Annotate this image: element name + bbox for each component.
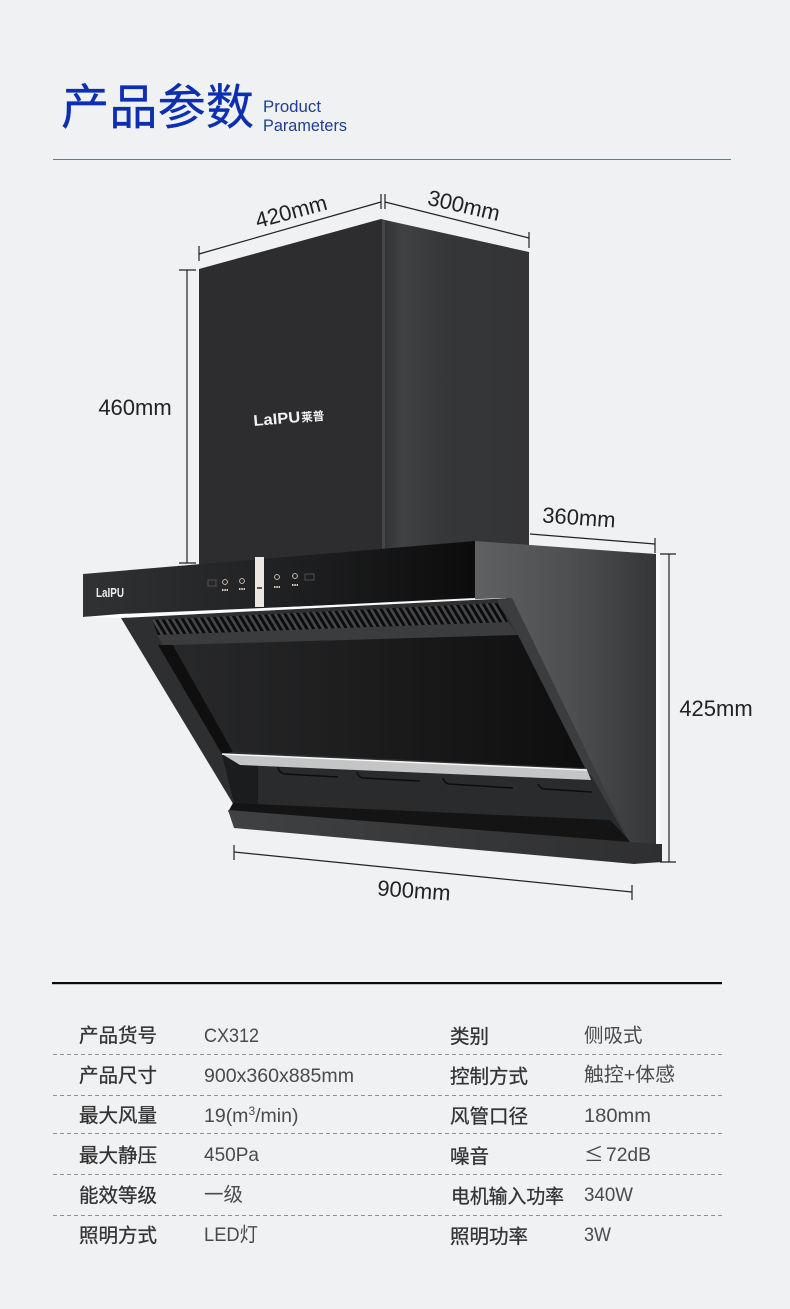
dimension: 360mm	[530, 502, 655, 553]
row: 最大风量 / 风管口径: 19(m	[204, 1105, 248, 1127]
row: 最大风量 / 风管口径: 风管口径	[450, 1100, 528, 1129]
black inner side band	[158, 645, 233, 754]
row: 最大静压 / 噪音: 噪音	[450, 1140, 489, 1169]
band logo: LaIPU	[96, 586, 124, 600]
row: 产品货号 / 类别: 侧吸式	[584, 1025, 643, 1047]
dimension: 360mm: 360mm	[542, 502, 616, 533]
row: 照明方式 / 照明功率: LED灯	[204, 1224, 258, 1246]
subtitle	[263, 98, 347, 135]
lower cavity	[222, 755, 632, 845]
title: 产品参数	[61, 68, 254, 138]
chimney logo: 莱普	[301, 407, 325, 426]
center white switch strip	[255, 557, 264, 607]
row: 最大静压 / 噪音	[79, 1138, 651, 1169]
row: 能效等级 / 电机输入功率	[79, 1179, 634, 1209]
row: 产品尺寸 / 控制方式: 产品尺寸	[79, 1059, 157, 1088]
row: 最大风量 / 风管口径: 180mm	[584, 1105, 651, 1127]
dimension lines	[98, 185, 753, 906]
row: 产品尺寸 / 控制方式: 控制方式	[450, 1060, 528, 1089]
row: 最大静压 / 噪音: ≤	[584, 1138, 604, 1167]
row: 最大风量 / 风管口径: 最大风量	[79, 1099, 157, 1128]
dimension: 300mm	[385, 185, 529, 248]
right frame edge	[497, 598, 630, 842]
row: 最大静压 / 噪音: 最大静压	[79, 1139, 157, 1168]
row: 能效等级 / 电机输入功率: 一级	[204, 1184, 243, 1206]
white halo around wall panel	[530, 545, 660, 845]
chimney logo: LaIPU	[253, 409, 301, 430]
row: 照明方式 / 照明功率	[79, 1219, 612, 1249]
cavity grooves	[278, 767, 592, 792]
row: 最大静压 / 噪音: 450Pa	[204, 1144, 259, 1166]
touch controls	[208, 574, 314, 590]
dimension: 420mm	[199, 190, 381, 261]
dimension: 425mm: 425mm	[679, 696, 753, 721]
chimney duct cover	[199, 219, 529, 568]
row: 产品尺寸 / 控制方式	[79, 1059, 675, 1089]
header rule	[53, 159, 731, 160]
row: 能效等级 / 电机输入功率: 电机输入功率	[451, 1180, 564, 1209]
dimension: 900mm	[234, 845, 632, 906]
row: 产品尺寸 / 控制方式: 900x360x885mm	[204, 1065, 354, 1087]
dimension: 420mm: 420mm	[252, 190, 330, 233]
row: 能效等级 / 电机输入功率: 340W	[584, 1184, 634, 1206]
subtitle: Product	[263, 98, 321, 116]
row: 最大风量 / 风管口径: /min)	[255, 1105, 298, 1127]
subtitle: Parameters	[263, 117, 347, 135]
row: 能效等级 / 电机输入功率: 能效等级	[79, 1179, 157, 1208]
vent slats	[152, 603, 508, 635]
row: 产品货号 / 类别: CX312	[204, 1025, 259, 1047]
dimension: 460mm	[98, 270, 196, 563]
specification table	[52, 982, 722, 1249]
row: 照明方式 / 照明功率: 照明功率	[450, 1220, 528, 1249]
chimney logo	[253, 407, 325, 430]
dimension: 425mm	[660, 554, 753, 862]
control band	[83, 541, 475, 617]
vent lower ledge	[157, 622, 518, 645]
black glass panel	[173, 635, 585, 768]
row: 最大静压 / 噪音: 72dB	[606, 1144, 651, 1166]
dimension: 300mm: 300mm	[425, 185, 502, 226]
row: 照明方式 / 照明功率: 3W	[584, 1224, 612, 1246]
row: 最大风量 / 风管口径: 3	[248, 1104, 255, 1118]
dimension: 460mm: 460mm	[98, 395, 172, 420]
row: 照明方式 / 照明功率: 照明方式	[79, 1219, 157, 1248]
side wall panel	[475, 541, 656, 846]
row: 产品尺寸 / 控制方式: 触控+体感	[584, 1064, 675, 1086]
row: 最大风量 / 风管口径	[79, 1099, 651, 1129]
row: 产品货号 / 类别: 类别	[450, 1020, 489, 1049]
dimension: 900mm: 900mm	[377, 875, 451, 906]
white light strip	[83, 598, 503, 618]
row: 产品货号 / 类别	[79, 1019, 643, 1049]
row: 产品货号 / 类别: 产品货号	[79, 1019, 157, 1048]
range hood product drawing	[83, 219, 662, 864]
cavity ledge	[228, 803, 632, 845]
header	[53, 68, 731, 160]
bottom lip	[228, 810, 662, 864]
silver grease strip	[222, 754, 591, 780]
angled front frame	[121, 598, 630, 842]
